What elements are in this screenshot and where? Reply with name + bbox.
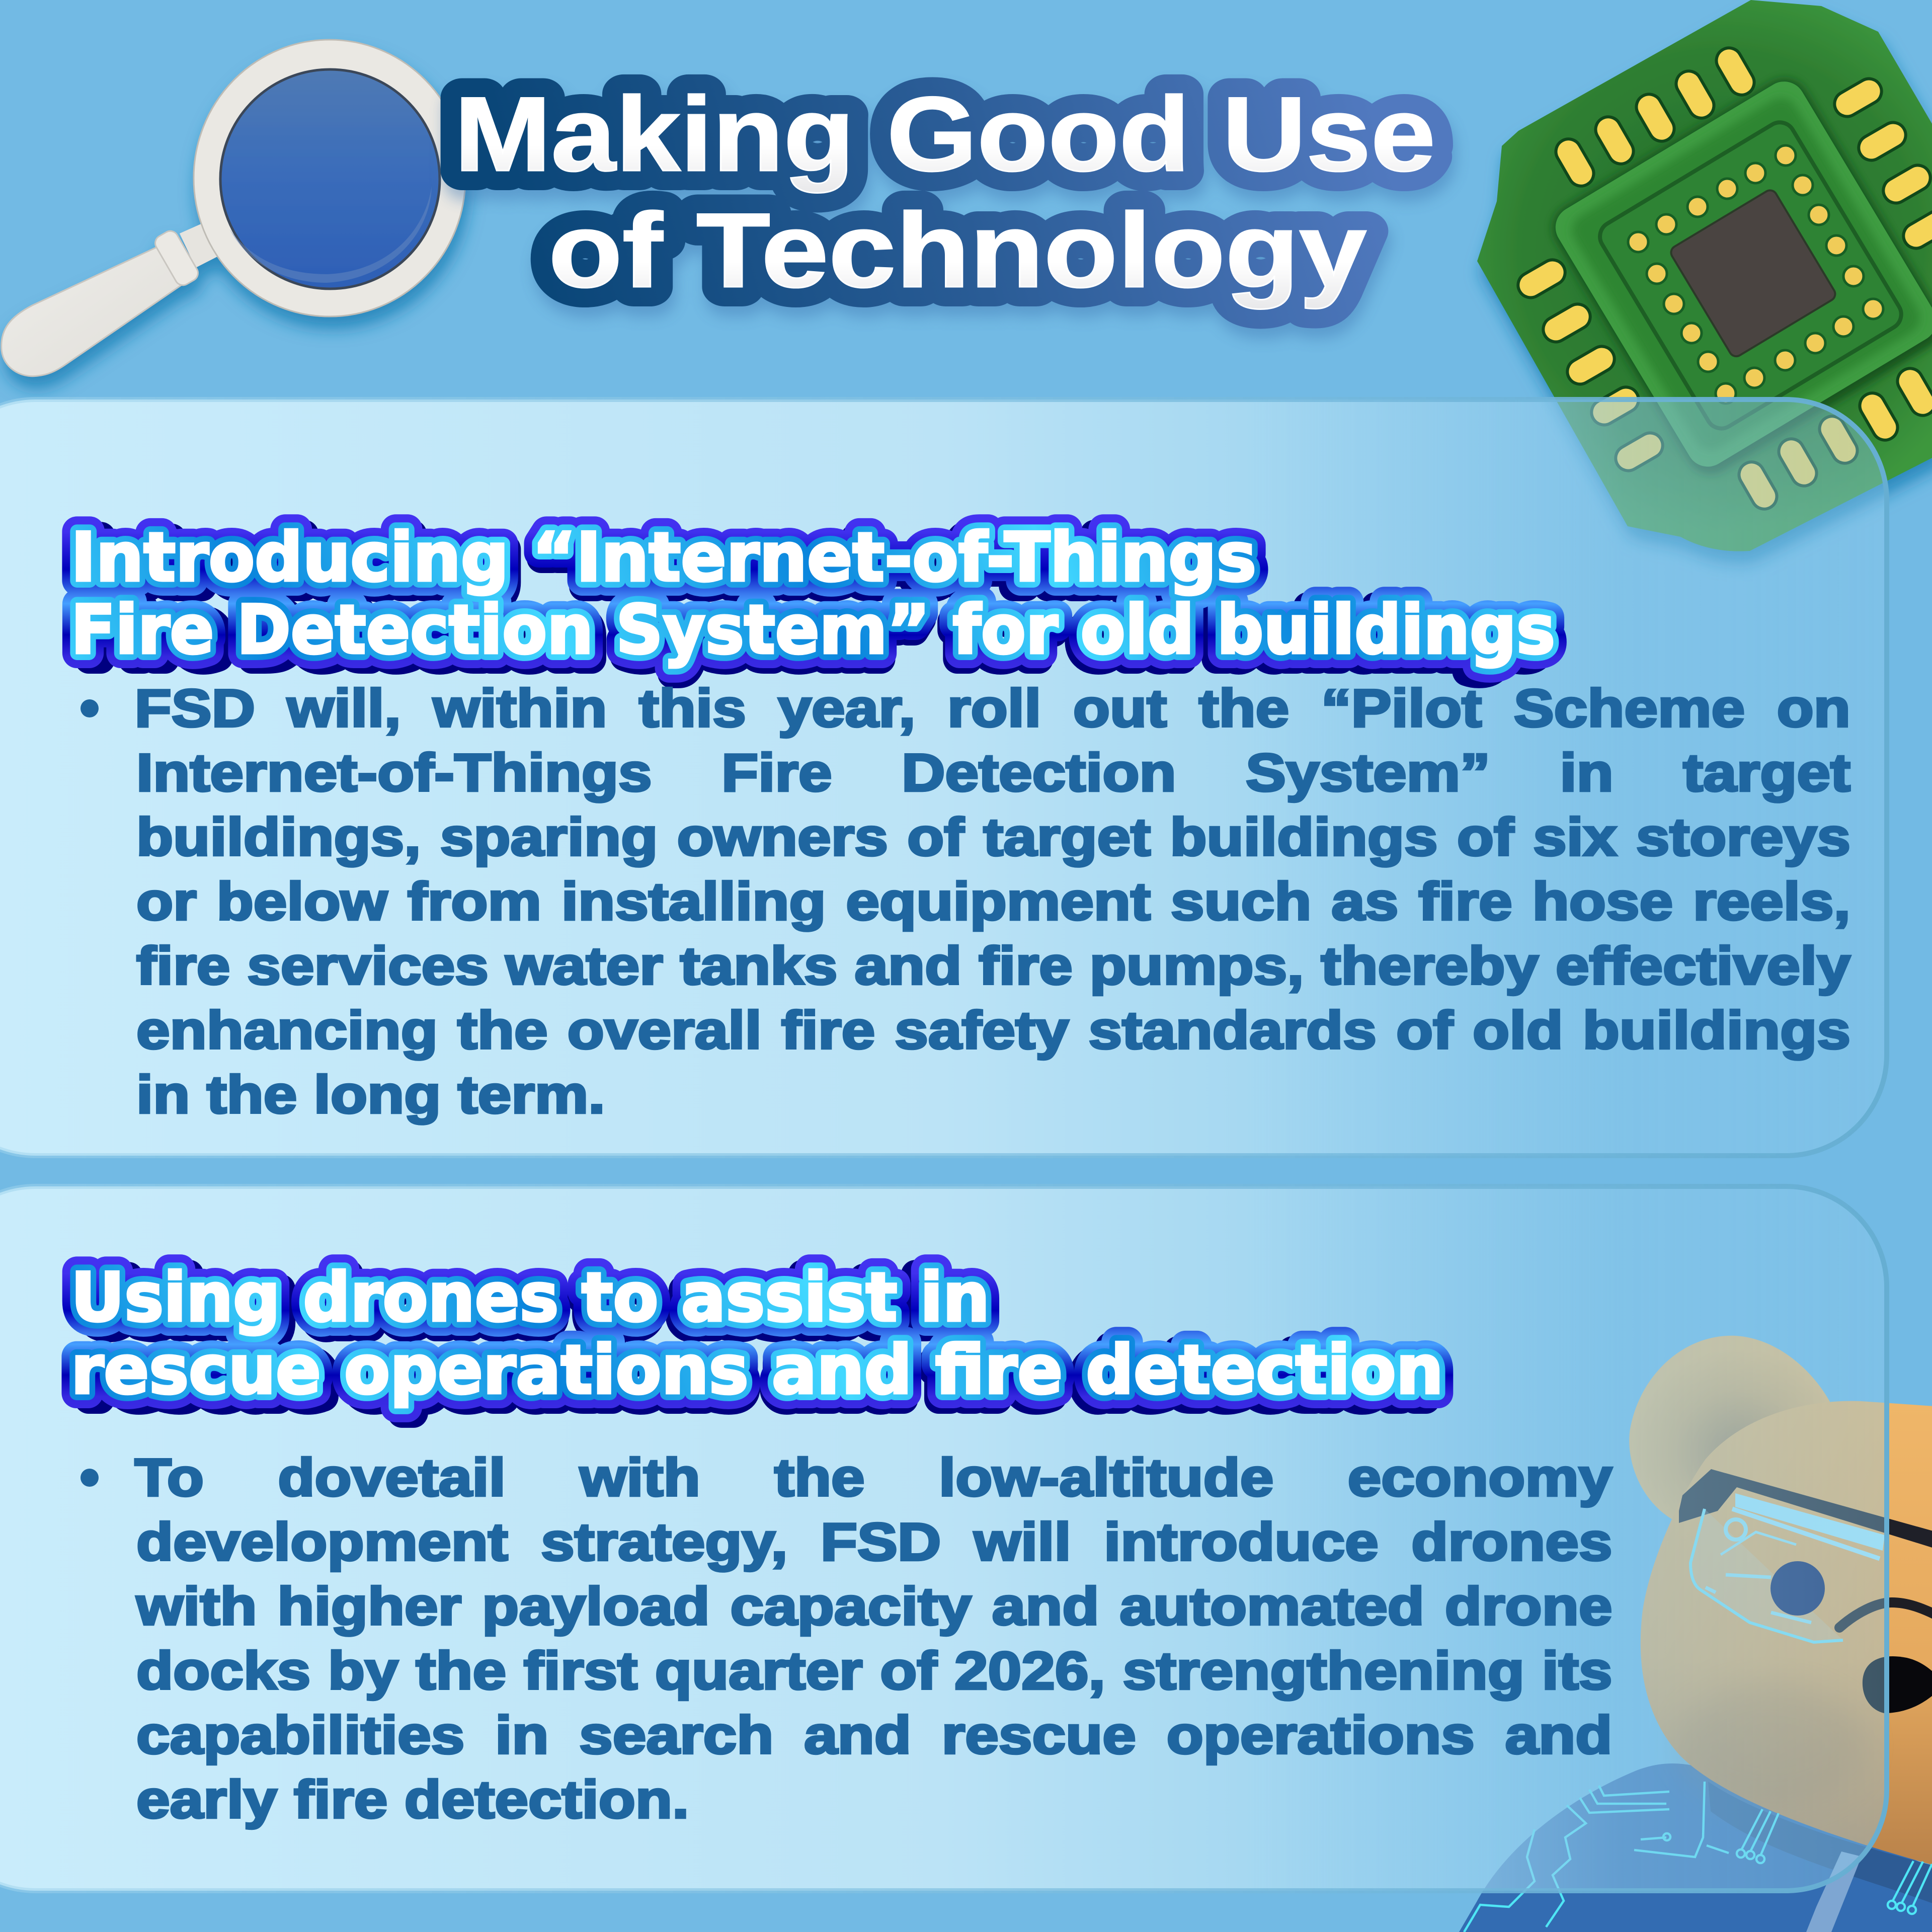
title <box>454 75 1438 319</box>
heading outer outline <box>71 1258 1443 1409</box>
panel: drones <box>0 1186 1887 1891</box>
bear ear <box>1629 1336 1830 1523</box>
text block: IoT pilot scheme: Internet-of-Things Fire Detection System” in target <box>136 743 1850 802</box>
ring <box>194 40 465 316</box>
heading text: Using drones to assist in <box>71 1258 990 1337</box>
heading text: Introducing “Internet-of-Things <box>71 518 1256 597</box>
icon: circuit chip <box>1477 0 1932 551</box>
title text: Making Good Use <box>454 75 1435 193</box>
bear visor <box>1691 1493 1885 1642</box>
bear jacket <box>1459 1763 1932 1932</box>
lens <box>220 69 440 289</box>
text block: IoT pilot scheme: fire services water tanks and fire pumps, thereby effectively <box>136 936 1850 996</box>
text block: IoT pilot scheme: buildings, sparing owners of target buildings of six storeys <box>136 808 1850 867</box>
bear nose <box>1863 1656 1932 1713</box>
text block: IoT pilot scheme: or below from installing equipment such as fire hose reels, <box>136 872 1850 931</box>
bullet 2 <box>80 1469 99 1487</box>
panel: IoT fire detection <box>0 399 1887 1156</box>
handle collar <box>152 228 201 288</box>
title outline <box>454 75 1435 309</box>
bear circuit traces <box>1464 1782 1932 1932</box>
text block: drones: early fire detection. <box>136 1770 689 1829</box>
heading inner outline <box>71 1258 1443 1409</box>
text block: drones <box>134 1448 1614 1830</box>
bear glasses frame <box>1679 1469 1932 1551</box>
chip steps <box>1544 70 1932 483</box>
title text: of Technology <box>548 191 1366 309</box>
bullet 1 <box>80 699 99 717</box>
heading text <box>71 518 1555 669</box>
text block: drones: docks by the first quarter of 2026, strengthening its <box>136 1641 1612 1701</box>
heading shadow <box>83 1264 1431 1415</box>
icon: bear mascot <box>1459 1336 1932 1932</box>
text block: IoT pilot scheme: enhancing the overall fire safety standards of old buildings <box>136 1001 1850 1060</box>
text block: drones: To dovetail with the low-altitude economy <box>135 1448 1612 1507</box>
heading text <box>71 1258 1443 1409</box>
bear zip <box>1806 1852 1862 1932</box>
handle grip <box>2 244 186 376</box>
heading outer outline <box>71 518 1555 669</box>
icon: magnifying glass <box>2 40 465 376</box>
heading: drones <box>71 1258 1443 1415</box>
text block: IoT pilot scheme: in the long term. <box>136 1065 605 1124</box>
bear collar <box>1708 1782 1932 1907</box>
heading shadow <box>83 524 1544 675</box>
text block: drones: capabilities in search and rescue operations and <box>136 1706 1612 1765</box>
text block: drones: with higher payload capacity and automated drone <box>136 1577 1612 1636</box>
handle neck <box>180 223 217 268</box>
bear cheek shade <box>1675 1685 1867 1806</box>
title shadow <box>457 85 1438 319</box>
chip board <box>1477 0 1932 551</box>
text block: drones: development strategy, FSD will introduce drones <box>136 1512 1612 1572</box>
heading: Internet-of-Things <box>71 518 1555 675</box>
lens rim highlight <box>229 186 432 283</box>
heading inner outline <box>71 518 1555 669</box>
title text <box>454 75 1435 309</box>
text block: IoT pilot scheme <box>135 679 1852 1125</box>
chip pads <box>1513 43 1932 514</box>
heading text: Fire Detection System” for old buildings <box>71 591 1555 669</box>
text block: IoT pilot scheme: FSD will, within this year, roll out the “Pilot Scheme on <box>135 679 1850 738</box>
bear eye <box>1770 1561 1825 1616</box>
bear head <box>1641 1401 1932 1868</box>
heading text: rescue operations and fire detection <box>71 1331 1443 1409</box>
bear brow <box>1839 1602 1932 1628</box>
